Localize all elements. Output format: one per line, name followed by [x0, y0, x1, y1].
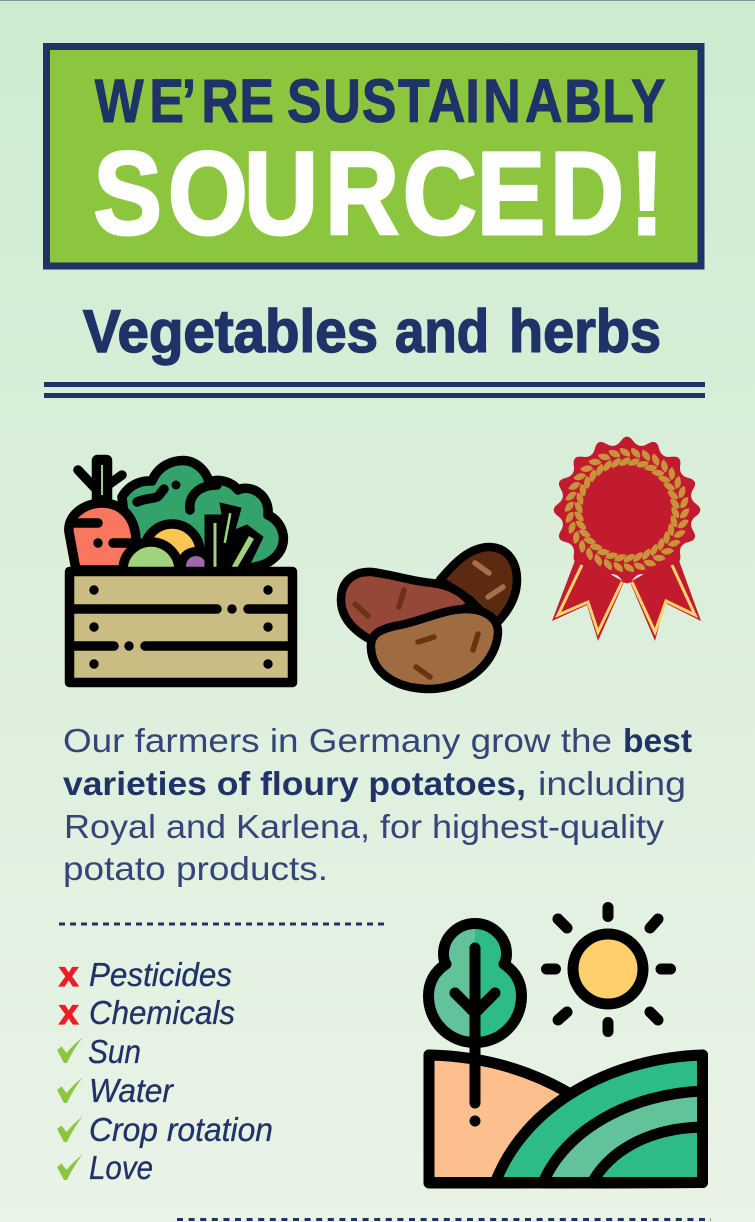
list labels: Water — [89, 1072, 175, 1109]
front potato — [371, 609, 498, 689]
back potato — [440, 547, 517, 625]
list labels: Pesticides — [89, 956, 232, 993]
body paragraph: best — [623, 722, 692, 759]
yellow vegetable — [144, 524, 200, 580]
check: sun — [57, 1038, 82, 1063]
check: crop rotation — [57, 1116, 82, 1142]
cross: chemicals: x — [59, 993, 79, 1032]
carrot greens — [78, 460, 122, 504]
tree — [428, 924, 522, 1126]
crate box — [70, 572, 292, 682]
leek stalks — [205, 503, 263, 570]
title line: we're sustainably: WE’RE SUSTAINABLY — [95, 67, 666, 135]
cross: pesticides: x — [59, 955, 79, 994]
check: water — [57, 1078, 82, 1103]
check: love — [57, 1154, 82, 1180]
leafy greens — [122, 460, 283, 568]
list labels: Love — [89, 1149, 153, 1186]
title line: sourced: SOURCED! — [94, 128, 664, 260]
icon: vegetable crate — [69, 460, 293, 682]
list: growing conditions — [57, 955, 273, 1186]
list labels — [88, 956, 273, 1186]
body paragraph: varieties of floury potatoes, — [63, 765, 526, 802]
field — [429, 1055, 702, 1183]
purple vegetable — [176, 547, 216, 587]
heading: vegetables and herbs: herbs — [509, 298, 661, 365]
heading: vegetables and herbs: and — [395, 298, 489, 365]
body paragraph: Our farmers in Germany grow the — [63, 722, 612, 759]
heading: vegetables and herbs: Vegetables — [83, 298, 378, 365]
green vegetable — [123, 542, 179, 598]
scalloped seal — [554, 437, 700, 583]
icon: potatoes — [341, 547, 517, 689]
list labels: Chemicals — [89, 994, 235, 1031]
body paragraph — [63, 722, 692, 887]
heading: vegetables and herbs — [83, 298, 661, 365]
icon: award rosette — [552, 437, 701, 641]
list labels: Sun — [88, 1033, 141, 1070]
middle potato — [341, 572, 472, 639]
body paragraph: including — [538, 765, 686, 802]
ribbons — [552, 555, 701, 641]
carrot — [69, 503, 136, 570]
sun — [546, 908, 670, 1032]
list labels: Crop rotation — [89, 1111, 273, 1148]
body paragraph: potato products. — [63, 850, 328, 887]
icon: landscape with tree and sun — [428, 908, 702, 1183]
body paragraph: Royal and Karlena, for highest-quality — [64, 808, 665, 845]
laurel wreath — [565, 448, 689, 572]
title banner — [46, 46, 701, 266]
